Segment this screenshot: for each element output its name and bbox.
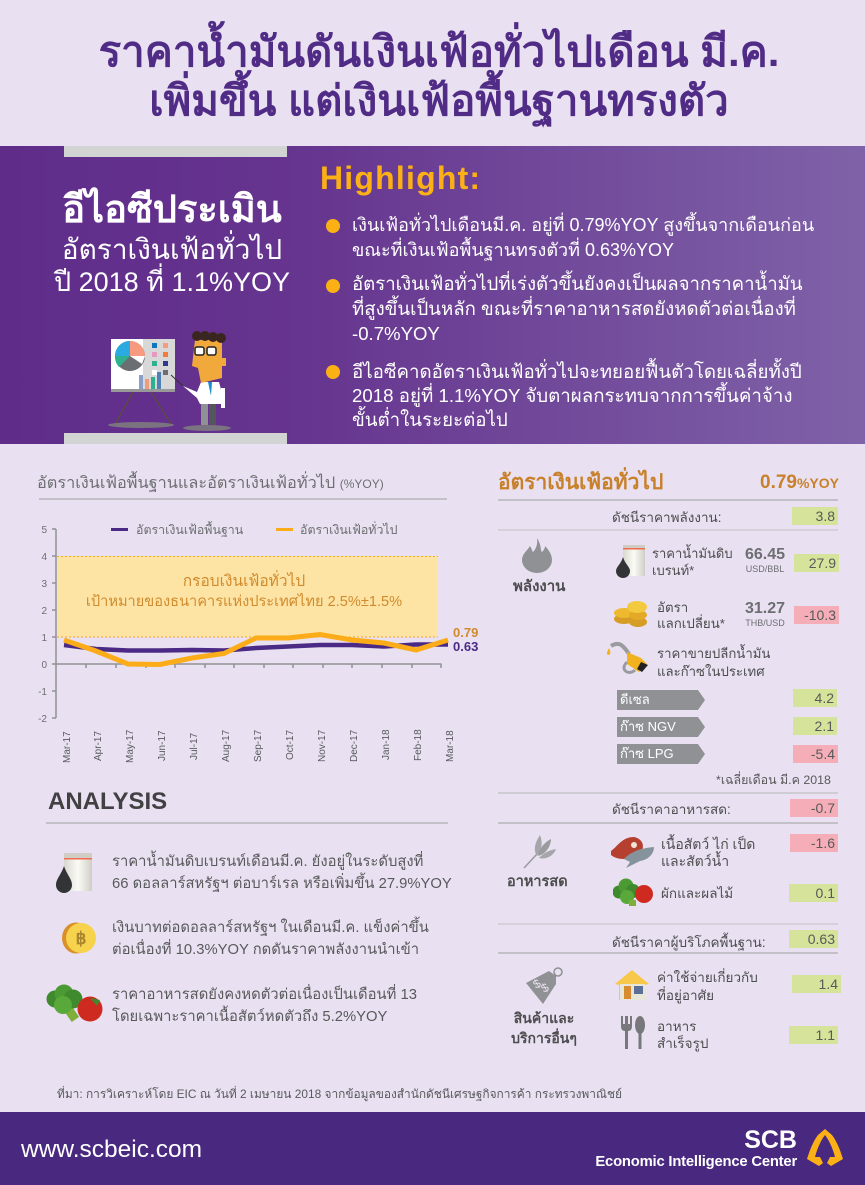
footnote: *เฉลี่ยเดือน มี.ค 2018 <box>716 773 831 787</box>
x axis labels: Jun-17 <box>157 730 168 761</box>
bullet 3: ขั้นต่ำในระยะต่อไป <box>352 409 508 430</box>
lpg tag <box>617 744 705 764</box>
brent price: USD/BBL <box>746 564 784 574</box>
brent label: ราคาน้ำมันดิบ <box>652 546 733 561</box>
analysis item: oil <box>56 850 452 893</box>
line chart <box>38 521 478 763</box>
value 2.1: 2.1 <box>815 718 834 734</box>
icon: flame <box>522 538 552 573</box>
icon: meat and fish <box>611 837 654 868</box>
icon: oil barrel <box>56 853 92 893</box>
value -1.6: -1.6 <box>811 835 835 851</box>
headline value: 0.79%YOY <box>760 472 839 493</box>
legend: อัตราเงินเฟ้อทั่วไป <box>300 521 398 537</box>
fresh food label: อาหารสด <box>507 874 568 890</box>
bullet 3 <box>326 358 802 430</box>
brand name: SCB <box>744 1126 797 1154</box>
brand name: Economic Intelligence Center <box>595 1154 797 1170</box>
x axis labels: Apr-17 <box>93 731 104 761</box>
bullet 2: -0.7%YOY <box>352 323 440 344</box>
meat label: และสัตว์น้ำ <box>661 853 729 869</box>
gray tab bottom <box>64 433 287 444</box>
bullet 1: ขณะที่เงินเฟ้อพื้นฐานทรงตัวที่ 0.63%YOY <box>352 240 674 260</box>
analysis heading: ANALYSIS <box>48 788 167 815</box>
analysis text: เงินบาทต่อดอลลาร์สหรัฐฯ ในเดือนมี.ค. แข็งค่าขึ้น <box>112 920 429 936</box>
value 4.2 <box>793 689 837 707</box>
value 0.63: 0.63 <box>808 931 835 947</box>
prepared food label: อาหาร <box>657 1019 696 1034</box>
exchange rate label: แลกเปลี่ยน* <box>657 616 725 631</box>
exchange rate value <box>745 600 785 628</box>
x axis labels: Nov-17 <box>317 729 328 762</box>
y axis labels: 4 <box>41 552 47 563</box>
x axis labels: Sep-17 <box>253 729 264 762</box>
prepared food label <box>657 1019 708 1052</box>
value -5.4: -5.4 <box>811 746 835 762</box>
ngv tag: ก๊าซ NGV <box>620 719 676 734</box>
icon: baht coin: ฿ <box>76 929 87 948</box>
icon: price tags <box>526 967 563 1004</box>
icon: presenter with board <box>108 331 231 431</box>
bullet 2 <box>326 270 803 344</box>
analysis item: baht <box>62 916 429 958</box>
target band <box>57 556 438 637</box>
exchange rate label <box>657 600 725 631</box>
chart heading: อัตราเงินเฟ้อพื้นฐานและอัตราเงินเฟ้อทั่วไป (%YOY) <box>37 474 384 492</box>
bullet 3: 2018 อยู่ที่ 1.1%YOY จับตาผลกระทบจากการขึ้นค่าจ้าง <box>352 385 792 406</box>
legend: อัตราเงินเฟ้อพื้นฐาน <box>136 521 244 537</box>
vegetables label: ผักและผลไม้ <box>661 886 733 901</box>
value 0.1 <box>789 884 838 902</box>
value -0.7 <box>790 799 838 817</box>
brent price <box>745 546 785 574</box>
title <box>99 20 779 128</box>
icon: vegetables <box>46 984 102 1022</box>
brent label <box>652 544 733 578</box>
housing label: ค่าใช้จ่ายเกี่ยวกับ <box>657 970 758 985</box>
analysis text: ต่อเนื่องที่ 10.3%YOY กดดันราคาพลังงานนำเข้า <box>112 942 419 958</box>
energy label: พลังงาน <box>513 578 565 595</box>
y axis labels: -1 <box>38 687 47 698</box>
title: เพิ่มขึ้น แต่เงินเฟ้อพื้นฐานทรงตัว <box>149 77 729 124</box>
prepared food label: สำเร็จรูป <box>657 1036 708 1051</box>
retail label: ราคาขายปลีกน้ำมัน <box>657 646 770 661</box>
core inflation line <box>64 644 448 650</box>
panel heading: อัตราเงินเฟ้อทั่วไป <box>498 471 663 494</box>
bullet 1 <box>326 212 814 261</box>
icon: oil barrel <box>616 545 645 578</box>
x axis labels: Oct-17 <box>285 730 296 760</box>
y axis labels: 2 <box>41 606 47 617</box>
forecast heading: อีไอซีประเมิน <box>62 189 282 231</box>
diesel tag <box>617 690 705 710</box>
core index row: ดัชนีราคาผู้บริโภคพื้นฐาน: <box>612 935 766 950</box>
band text <box>86 570 402 610</box>
exchange rate label: อัตรา <box>657 600 688 615</box>
band text: กรอบเงินเฟ้อทั่วไป <box>183 570 305 590</box>
panel: inflation breakdown <box>498 467 839 679</box>
housing label: ที่อยู่อาศัย <box>657 988 714 1003</box>
end labels: 0.63 <box>453 639 478 654</box>
legend <box>111 521 398 537</box>
value 1.4 <box>792 975 841 993</box>
goods and services label: บริการอื่นๆ <box>511 1030 577 1046</box>
value 0.1: 0.1 <box>816 885 835 901</box>
value -10.3: -10.3 <box>804 607 836 623</box>
value -5.4 <box>793 745 838 763</box>
value 1.1 <box>789 1026 838 1044</box>
x axis labels <box>62 729 456 763</box>
band text: เป้าหมายของธนาคารแห่งประเทศไทย 2.5%±1.5% <box>86 592 402 610</box>
value -0.7: -0.7 <box>811 800 835 816</box>
icon: house <box>615 970 649 1000</box>
forecast heading: อัตราเงินเฟ้อทั่วไป <box>62 234 282 265</box>
icon: wheat <box>524 835 556 868</box>
icon: price tags: $ <box>530 976 544 992</box>
x axis labels: May-17 <box>125 729 136 763</box>
x axis labels: Mar-18 <box>445 730 456 762</box>
value 1.1: 1.1 <box>816 1027 835 1043</box>
analysis text: โดยเฉพาะราคาเนื้อสัตว์หดตัวถึง 5.2%YOY <box>112 1009 387 1025</box>
diesel tag: ดีเซล <box>620 692 650 707</box>
icon: baht coin <box>62 922 96 954</box>
icon: fuel nozzle <box>606 642 648 674</box>
exchange rate value: 31.27 <box>745 600 785 617</box>
brent price: 66.45 <box>745 546 785 563</box>
value -10.3 <box>794 606 839 624</box>
value 27.9 <box>794 554 839 572</box>
gray tab top <box>64 146 287 157</box>
y axis labels: 3 <box>41 579 47 590</box>
x axis labels: Mar-17 <box>62 731 73 763</box>
analysis text: ราคาน้ำมันดิบเบรนท์เดือนมี.ค. ยังอยู่ในระดับสูงที่ <box>112 854 423 870</box>
goods and services label: สินค้าและ <box>514 1010 574 1026</box>
analysis item: fresh food <box>46 984 417 1025</box>
x axis labels: Jul-17 <box>189 732 200 760</box>
y axis labels: 5 <box>41 525 47 536</box>
end labels: 0.79 <box>453 625 478 640</box>
lpg tag: ก๊าซ LPG <box>620 746 674 761</box>
y axis labels: 1 <box>41 633 47 644</box>
website: www.scbeic.com <box>21 1136 202 1163</box>
value 0.63 <box>789 930 838 948</box>
bullet 2: อัตราเงินเฟ้อทั่วไปที่เร่งตัวขึ้นยังคงเป็นผลจากราคาน้ำมัน <box>352 273 803 294</box>
analysis text <box>112 916 429 958</box>
highlight heading: Highlight: <box>320 160 481 196</box>
brent label: เบรนท์* <box>652 563 694 578</box>
meat label: เนื้อสัตว์ ไก่ เป็ด <box>661 836 755 852</box>
exchange rate value: THB/USD <box>745 618 785 628</box>
source note: ที่มา: การวิเคราะห์โดย EIC ณ วันที่ 2 เมษายน 2018 จากข้อมูลของสำนักดัชนีเศรษฐกิจการค้า กระทรวงพาณิชย์ <box>57 1087 622 1101</box>
fresh food index row: ดัชนีราคาอาหารสด: <box>612 802 731 817</box>
meat label <box>661 834 755 869</box>
value 3.8 <box>792 507 838 525</box>
value 1.4: 1.4 <box>819 976 838 992</box>
housing label <box>657 968 758 1004</box>
y axis labels: -2 <box>38 714 47 725</box>
y axis labels: 0 <box>41 660 47 671</box>
panel: footer <box>0 1112 865 1185</box>
title: ราคาน้ำมันดันเงินเฟ้อทั่วไปเดือน มี.ค. <box>99 28 779 75</box>
retail label: และก๊าซในประเทศ <box>657 664 765 679</box>
analysis text: 66 ดอลลาร์สหรัฐฯ ต่อบาร์เรล หรือเพิ่มขึ้น 27.9%YOY <box>112 876 452 892</box>
bullet 3: อีไอซีคาดอัตราเงินเฟ้อทั่วไปจะทยอยฟื้นตัวโดยเฉลี่ยทั้งปี <box>352 361 802 382</box>
icon: vegetables <box>613 878 653 906</box>
energy index row: ดัชนีราคาพลังงาน: <box>612 510 722 525</box>
icon: price tags: $ <box>538 980 552 996</box>
ngv tag <box>617 717 705 737</box>
end labels <box>453 625 478 654</box>
bullet 2: ที่สูงขึ้นเป็นหลัก ขณะที่ราคาอาหารสดยังหดตัวต่อเนื่องที่ <box>352 298 796 319</box>
icon: coins <box>614 601 647 627</box>
value -1.6 <box>790 834 838 852</box>
bullet 1: เงินเฟ้อทั่วไปเดือนมี.ค. อยู่ที่ 0.79%YOY สูงขึ้นจากเดือนก่อน <box>352 215 814 235</box>
x axis labels: Aug-17 <box>221 729 232 762</box>
value 4.2: 4.2 <box>815 690 834 706</box>
value 2.1 <box>793 717 837 735</box>
analysis text <box>112 850 452 892</box>
y axis labels <box>38 525 47 725</box>
goods and services label <box>511 1010 577 1046</box>
x axis labels: Dec-17 <box>349 729 360 762</box>
icon: fork and spoon <box>621 1016 645 1049</box>
forecast heading <box>54 187 290 297</box>
value 3.8: 3.8 <box>816 508 835 524</box>
forecast heading: ปี 2018 ที่ 1.1%YOY <box>54 267 290 297</box>
x axis labels: Jan-18 <box>381 729 392 760</box>
retail label <box>657 644 770 679</box>
analysis text <box>112 984 417 1025</box>
value 27.9: 27.9 <box>809 555 836 571</box>
headline inflation line <box>64 634 448 664</box>
brand name <box>595 1126 798 1170</box>
analysis text: ราคาอาหารสดยังคงหดตัวต่อเนื่องเป็นเดือนที่ 13 <box>112 987 417 1003</box>
icon: SCB logo <box>807 1129 843 1166</box>
x axis labels: Feb-18 <box>413 729 424 761</box>
panel: highlight band <box>0 146 865 444</box>
